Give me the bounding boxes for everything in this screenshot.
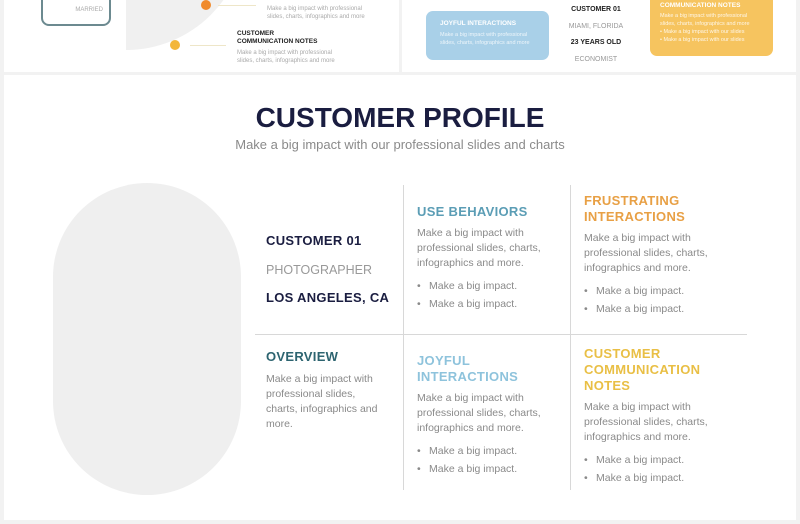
customer info — [569, 6, 624, 62]
panel: use behaviors — [417, 204, 541, 310]
yellow box: • Make a big impact with our slides — [660, 29, 744, 35]
panel: frustrating interactions: FRUSTRATING — [584, 193, 680, 208]
text: communication notes — [237, 30, 335, 64]
panel: customer communication notes: CUSTOMER — [584, 346, 661, 361]
title: CUSTOMER PROFILE — [256, 102, 544, 133]
panel: overview: Make a big impact with professional slides, charts, infographics and more. — [266, 373, 377, 430]
panel: customer communication notes: Make a big impact. — [596, 454, 684, 466]
subtitle: Make a big impact with our professional slides and charts — [235, 137, 565, 152]
panel: joyful interactions: Make a big impact. — [429, 463, 517, 475]
yellow box: Make a big impact with professional — [660, 13, 747, 19]
panel: frustrating interactions: Make a big impact. — [596, 303, 684, 315]
panel: joyful interactions — [417, 353, 541, 475]
text: communication notes: CUSTOMER — [237, 30, 274, 37]
icon: yellow dot — [170, 40, 180, 50]
panel: use behaviors: Make a big impact. — [429, 280, 517, 292]
panel: customer communication notes: COMMUNICATION — [584, 362, 700, 377]
small profile box: MARRIED — [75, 7, 103, 13]
panel: frustrating interactions: INTERACTIONS — [584, 209, 685, 224]
panel: joyful interactions: INTERACTIONS — [417, 369, 518, 384]
panel: use behaviors: USE BEHAVIORS — [417, 204, 528, 219]
customer info: ECONOMIST — [575, 56, 617, 62]
customer info: PHOTOGRAPHER — [266, 263, 372, 277]
joyful box: JOYFUL INTERACTIONS — [440, 20, 516, 27]
icon: orange dot — [201, 0, 211, 10]
joyful box: slides, charts, infographics and more — [440, 40, 530, 46]
yellow box: slides, charts, infographics and more — [660, 21, 750, 27]
joyful box: Make a big impact with professional — [440, 32, 527, 38]
photo placeholder oval — [53, 183, 241, 495]
small profile box — [41, 0, 111, 26]
customer info: CUSTOMER 01 — [571, 6, 621, 13]
text: communication notes: COMMUNICATION NOTES — [237, 38, 317, 45]
panel: use behaviors: Make a big impact with professional slides, charts, infographics and more. — [417, 227, 541, 269]
yellow box: • Make a big impact with our slides — [660, 37, 744, 43]
panel: frustrating interactions — [584, 193, 708, 315]
panel: frustrating interactions: Make a big impact with professional slides, charts, infographics and more. — [584, 232, 708, 274]
panel: joyful interactions: Make a big impact. — [429, 445, 517, 457]
panel: customer communication notes — [584, 346, 708, 484]
text: communication notes: slides, charts, infographics and more — [237, 58, 335, 64]
panel: customer communication notes: Make a big impact. — [596, 472, 684, 484]
customer info — [266, 233, 389, 305]
text: interactions — [267, 0, 365, 20]
top strip card right — [402, 0, 796, 72]
text: communication notes: Make a big impact with professional — [237, 50, 332, 56]
panel: joyful interactions: Make a big impact with professional slides, charts, infographics and more. — [417, 392, 541, 434]
panel: use behaviors: Make a big impact. — [429, 298, 517, 310]
grey semicircle — [126, 0, 246, 50]
top strip card left — [4, 0, 399, 72]
panel: overview: OVERVIEW — [266, 349, 338, 364]
panel: customer communication notes: Make a big impact with professional slides, charts, infographics and more. — [584, 401, 708, 443]
panel: customer communication notes: NOTES — [584, 378, 630, 393]
yellow box: COMMUNICATION NOTES — [660, 2, 740, 9]
customer info: CUSTOMER 01 — [266, 233, 362, 248]
panel: joyful interactions: JOYFUL — [417, 353, 470, 368]
customer info: MIAMI, FLORIDA — [569, 22, 623, 30]
text: interactions: slides, charts, infographics and more — [267, 14, 365, 20]
joyful box — [426, 11, 549, 60]
customer info: LOS ANGELES, CA — [266, 290, 389, 305]
panel: frustrating interactions: Make a big impact. — [596, 285, 684, 297]
customer info: 23 YEARS OLD — [571, 39, 621, 46]
yellow box — [650, 0, 773, 56]
text: interactions: Make a big impact with professional — [267, 6, 362, 12]
